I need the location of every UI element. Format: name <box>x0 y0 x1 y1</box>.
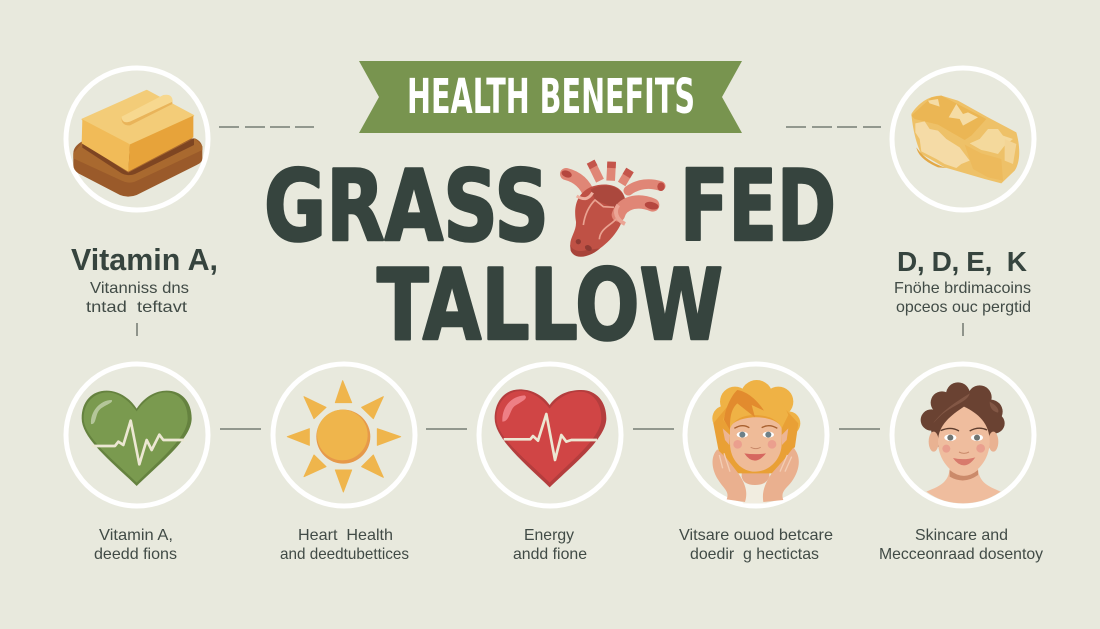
connector lines bottom row <box>220 428 880 430</box>
text: caption <box>679 527 833 563</box>
text: d d e k heading <box>894 246 1031 336</box>
panel: blonde face <box>679 364 833 563</box>
text: caption <box>513 527 587 563</box>
text: caption: Energy <box>524 527 574 544</box>
icon: brunette woman portrait <box>921 382 1005 503</box>
panel: sun <box>273 364 415 563</box>
banner: health benefits: HEALTH BENEFITS <box>407 69 695 125</box>
text: vitamin a heading: tntad teftavt <box>86 299 188 316</box>
text: d d e k heading: Fnöhe brdimacoins <box>894 280 1031 297</box>
text: caption: Heart Health <box>298 527 393 544</box>
panel: butter <box>66 68 208 210</box>
title: grass fed tallow: TALLOW <box>377 249 723 363</box>
title: grass fed tallow: FED <box>680 150 836 264</box>
title: grass fed tallow <box>264 150 836 363</box>
panel: green heart <box>66 364 208 563</box>
text: caption: Mecceonraad dosentoy <box>879 546 1043 563</box>
text: caption: deedd fions <box>94 546 177 563</box>
title: grass fed tallow: GRASS <box>264 150 549 264</box>
text: d d e k heading: opceos ouc pergtid <box>896 299 1031 316</box>
icon: green heart with pulse <box>82 391 192 486</box>
panel: tallow block <box>892 68 1034 210</box>
text: caption: Vitsare oɯod betcare <box>679 527 833 544</box>
text: vitamin a heading: Vitamin A, <box>71 242 218 277</box>
panel: red heart <box>479 364 621 563</box>
dashed connector left <box>219 126 314 128</box>
text: caption: andd fione <box>513 546 587 563</box>
icon: butter on dish <box>73 91 202 197</box>
text: caption: Skincare and <box>915 527 1008 544</box>
dashed connector right <box>786 126 881 128</box>
text: caption <box>280 527 409 563</box>
text: caption <box>879 527 1043 563</box>
text: d d e k heading: D, D, E, K <box>897 246 1027 277</box>
icon: blonde woman with hands <box>712 380 800 503</box>
panel: brunette face <box>879 364 1043 563</box>
text: caption: Vitamin A, <box>99 527 173 544</box>
text: caption: doedir g hectictas <box>690 546 819 563</box>
icon: anatomical heart <box>561 162 665 257</box>
text: vitamin a heading <box>71 242 218 336</box>
icon: sun <box>287 381 401 492</box>
banner: health benefits <box>359 61 742 133</box>
text: vitamin a heading: Vitanniss dns <box>90 280 189 297</box>
icon: tallow block <box>911 96 1019 183</box>
text: caption <box>94 527 177 563</box>
text: caption: and deedtubettices <box>280 546 409 563</box>
icon: red heart with pulse <box>495 389 606 487</box>
